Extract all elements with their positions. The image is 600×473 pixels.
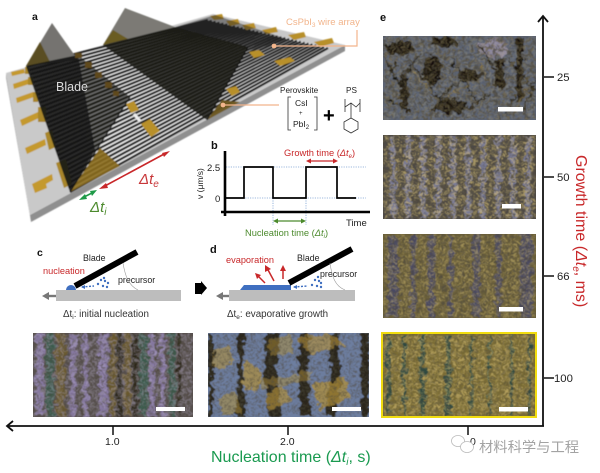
callout CsPbI3 wire array: 3 bbox=[312, 22, 316, 29]
label c: c bbox=[37, 247, 43, 259]
axis: growth time: 50 bbox=[557, 172, 570, 184]
watermark bbox=[452, 436, 579, 456]
growth time annotation: Growth time (Δt bbox=[284, 148, 349, 158]
substrate bbox=[56, 290, 181, 301]
nucleation time annotation: i bbox=[324, 234, 326, 240]
axis: growth time: 100 bbox=[554, 373, 573, 385]
micrograph e: 100 ms highlighted bbox=[382, 333, 536, 417]
growth time annotation: ) bbox=[352, 148, 355, 158]
micrograph c: 1.0 s bbox=[33, 333, 193, 417]
nucleus bbox=[66, 285, 76, 290]
scale bar bbox=[498, 107, 523, 112]
d labels: evaporation bbox=[226, 255, 274, 265]
blade 1 bbox=[26, 23, 130, 192]
label b: b bbox=[211, 140, 218, 152]
d caption: Δt bbox=[227, 309, 236, 320]
velocity trace bbox=[226, 167, 356, 198]
perovskite formula: PS bbox=[346, 86, 357, 95]
direction arrow bbox=[216, 292, 229, 300]
guide lines bbox=[226, 167, 366, 225]
c caption: i bbox=[72, 314, 74, 321]
wire array bbox=[28, 20, 328, 192]
axes bbox=[221, 151, 370, 216]
callout CsPbI3 wire array: wire array bbox=[316, 17, 360, 28]
c labels: Blade bbox=[83, 253, 106, 263]
axis: growth time: Growth time ( Δt bbox=[572, 155, 589, 266]
axis: nucleation time: 0 bbox=[470, 436, 476, 448]
axis labels bbox=[195, 163, 367, 229]
gold electrode pads left bbox=[11, 67, 72, 193]
watermark: 材料科学与工程 bbox=[479, 439, 579, 456]
axis: nucleation time: 1.0 bbox=[105, 436, 120, 448]
micrograph e: 66 ms bbox=[383, 234, 536, 318]
d labels: Blade bbox=[297, 253, 320, 263]
film bbox=[240, 285, 291, 290]
substrate bbox=[229, 290, 355, 301]
nucleation time annotation: Nucleation time (Δt bbox=[245, 228, 324, 238]
panel a: blade coating schematic bbox=[6, 8, 345, 222]
yellow frame bbox=[382, 333, 536, 417]
axis: nucleation time: , s) bbox=[348, 449, 371, 466]
substrate plate bbox=[6, 14, 345, 222]
precursor dots bbox=[293, 276, 322, 289]
c labels: precursor bbox=[118, 275, 155, 285]
c caption: Δt bbox=[63, 309, 72, 320]
blade bbox=[75, 252, 137, 286]
perovskite formula: CsI bbox=[295, 98, 308, 108]
perovskite formula: 2 bbox=[306, 125, 310, 131]
nucleation interval arrow: i bbox=[104, 207, 107, 218]
nucleation interval arrow bbox=[79, 190, 107, 218]
label e: e bbox=[380, 12, 386, 24]
nucleation time annotation bbox=[245, 218, 328, 240]
nucleation interval arrow: Δt bbox=[90, 199, 104, 216]
axis: growth time bbox=[538, 16, 589, 426]
micrograph e: 25 ms bbox=[383, 36, 536, 120]
d caption: : evaporative growth bbox=[240, 309, 328, 320]
c caption: : initial nucleation bbox=[74, 309, 149, 320]
blade bbox=[289, 249, 352, 283]
micrograph d: 2.0 s bbox=[208, 333, 369, 417]
axis: nucleation time: 2.0 bbox=[280, 436, 295, 448]
direction arrow bbox=[42, 292, 56, 300]
axis labels: 0 bbox=[215, 194, 220, 205]
growth time annotation: e bbox=[349, 154, 353, 160]
scale bar bbox=[156, 407, 185, 411]
perovskite formula bbox=[280, 86, 360, 133]
micrograph e: 50 ms bbox=[383, 135, 536, 219]
axis: growth time: , ms) bbox=[572, 272, 589, 307]
growth interval arrow: Δt bbox=[139, 171, 153, 188]
panel b: velocity profile chart bbox=[195, 140, 370, 240]
axis: growth time: e bbox=[570, 266, 581, 272]
scale bar bbox=[332, 407, 361, 411]
micrograph texture bbox=[383, 334, 535, 416]
d labels: precursor bbox=[320, 269, 357, 279]
axis: growth time: 25 bbox=[557, 72, 570, 84]
axis labels: v (μm/s) bbox=[195, 168, 205, 199]
axis labels: Time bbox=[346, 218, 367, 229]
growth time annotation bbox=[284, 148, 355, 164]
scale bar bbox=[502, 204, 521, 208]
label d: d bbox=[210, 244, 217, 256]
step arrow bbox=[195, 281, 207, 295]
d caption: e bbox=[236, 314, 240, 321]
scale bar bbox=[499, 307, 523, 312]
callout CsPbI3 wire array bbox=[272, 17, 360, 48]
axis labels: 2.5 bbox=[207, 163, 220, 174]
precursor dots bbox=[81, 277, 109, 289]
panel d: evaporative growth schematic bbox=[210, 244, 357, 321]
perovskite formula: PbI bbox=[293, 119, 306, 129]
label a: a bbox=[32, 11, 38, 23]
blade 2 bbox=[103, 8, 290, 120]
blade label: Blade bbox=[56, 80, 88, 94]
perovskite formula: + bbox=[299, 111, 303, 117]
scale bar bbox=[499, 407, 528, 412]
perovskite formula: + bbox=[323, 105, 335, 127]
callout CsPbI3 wire array: CsPbI bbox=[286, 17, 312, 28]
axis: growth time: 66 bbox=[557, 271, 570, 283]
growth interval arrow: e bbox=[153, 179, 159, 190]
axis: nucleation time bbox=[7, 421, 544, 468]
c labels bbox=[43, 253, 155, 290]
panel c: initial nucleation schematic bbox=[37, 247, 181, 321]
callout perovskite line bbox=[221, 103, 279, 107]
growth interval arrow bbox=[99, 151, 170, 190]
axis: nucleation time: Nucleation time (Δt bbox=[211, 449, 346, 466]
mid-array gold pads bbox=[126, 14, 334, 137]
evaporation arrows bbox=[255, 265, 286, 283]
c labels: nucleation bbox=[43, 266, 85, 276]
d labels bbox=[226, 253, 357, 290]
nucleation time annotation: ) bbox=[325, 228, 328, 238]
axis: nucleation time: i bbox=[346, 457, 349, 468]
perovskite formula: Perovskite bbox=[280, 86, 319, 95]
